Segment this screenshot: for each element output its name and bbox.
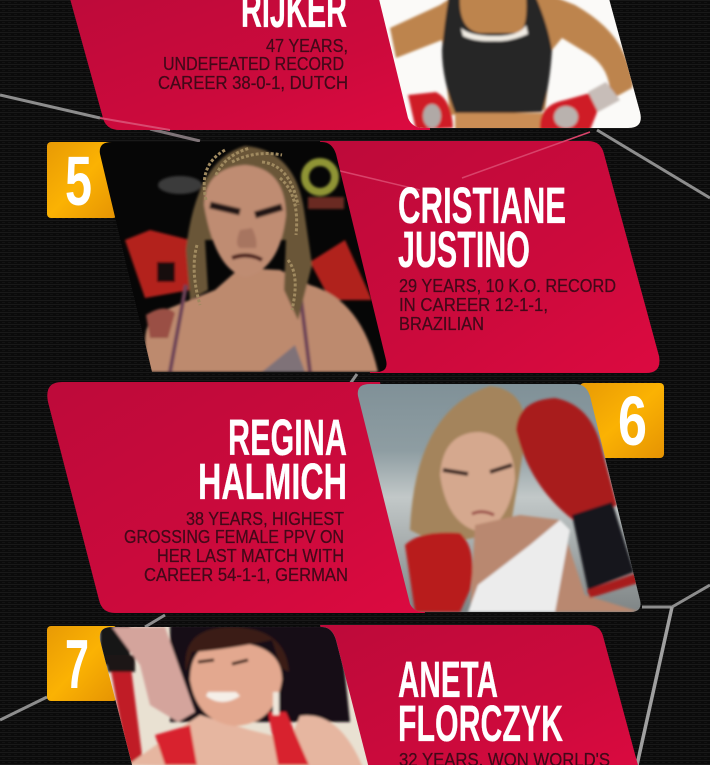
photo: fighter with braids <box>95 140 390 375</box>
description: 29 YEARS, 10 K.O. RECORD <box>399 276 616 296</box>
name: REGINA <box>228 409 347 466</box>
panel: Regina Halmich <box>47 380 664 615</box>
rank badge 7: 7 <box>65 625 89 703</box>
photo: smiling fighter <box>95 625 375 765</box>
red card <box>69 0 430 130</box>
panel: Aneta Florczyk <box>47 625 642 765</box>
panel: Rijker <box>69 0 650 135</box>
description <box>124 509 348 585</box>
name: CRISTIANE <box>398 177 566 234</box>
description: UNDEFEATED RECORD <box>163 54 344 74</box>
description: HER LAST MATCH WITH <box>157 546 344 566</box>
red card <box>320 625 642 765</box>
faint line on card <box>100 118 170 130</box>
photo: fighter with red gloves <box>350 380 645 615</box>
red card <box>47 382 425 613</box>
red card <box>320 141 659 373</box>
description <box>399 276 616 334</box>
braided hair <box>194 148 298 310</box>
description: CAREER 38-0-1, DUTCH <box>158 73 348 93</box>
faint lines on card <box>336 132 590 190</box>
rank badge 7 <box>47 625 117 703</box>
panel: Cristiane Justino <box>47 132 659 375</box>
description: 47 YEARS, <box>266 36 348 56</box>
name: ANETA <box>398 651 498 708</box>
description: 38 YEARS, HIGHEST <box>186 509 344 529</box>
rank badge 6: 6 <box>618 382 647 460</box>
panel: Regina Halmich: HALMICH <box>198 453 347 510</box>
rank badge 5 <box>47 142 117 220</box>
description: GROSSING FEMALE PPV ON <box>124 527 344 547</box>
panel: Cristiane Justino: JUSTINO <box>398 221 530 278</box>
description: BRAZILIAN <box>399 314 484 334</box>
rank badge 6 <box>580 382 664 460</box>
description: CAREER 54-1-1, GERMAN <box>144 565 348 585</box>
description: IN CAREER 12-1-1, <box>399 295 548 315</box>
rank badge 5: 5 <box>65 142 92 220</box>
description <box>158 36 348 93</box>
panel: Aneta Florczyk: FLORCZYK <box>398 695 563 752</box>
photo: fighter in black top <box>379 0 641 128</box>
